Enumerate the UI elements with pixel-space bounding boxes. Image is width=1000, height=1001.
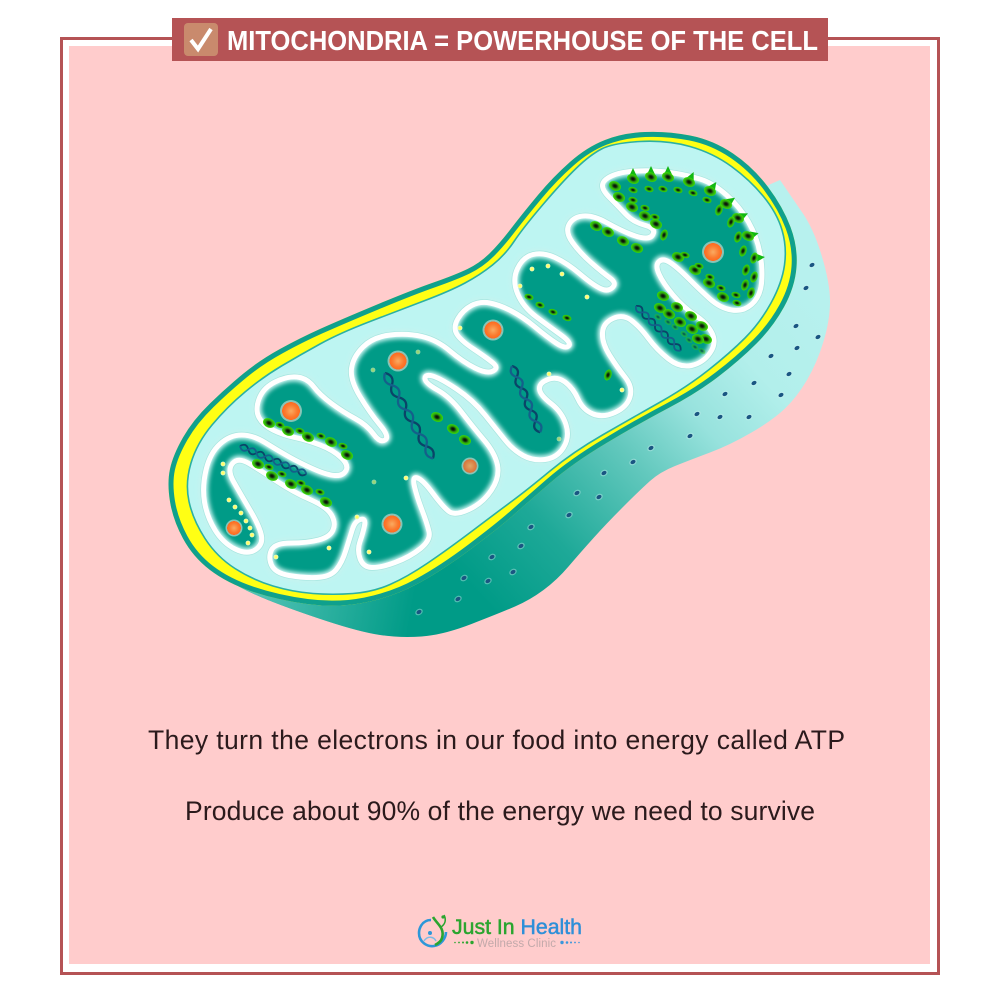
matrix and inner membrane cristae bbox=[204, 171, 762, 578]
outer membrane bbox=[168, 132, 797, 606]
logo wordmark: Just In Health bbox=[452, 916, 582, 939]
logo green dots bbox=[454, 941, 474, 944]
mitochondrion illustration bbox=[168, 132, 830, 637]
title text: MITOCHONDRIA = POWERHOUSE OF THE CELL bbox=[227, 25, 818, 56]
green organelles bbox=[250, 170, 759, 509]
icon: check box bbox=[184, 23, 218, 56]
logo tagline: Wellness Clinic bbox=[477, 938, 556, 950]
text: ATP statement: They turn the electrons in our food into energy called ATP bbox=[148, 725, 845, 755]
orange granules bbox=[226, 241, 724, 536]
3D body of the mitochondrion bbox=[200, 180, 830, 637]
logo: Just In Health Wellness Clinic bbox=[419, 915, 582, 950]
surface pores bbox=[414, 260, 823, 617]
yellow dots bbox=[221, 264, 624, 559]
green membrane cones bbox=[629, 166, 765, 262]
title banner bbox=[172, 18, 828, 61]
logo blue dots bbox=[560, 941, 580, 944]
text: 90% energy statement: Produce about 90% of the energy we need to survive bbox=[185, 796, 815, 826]
icon: logo emblem bbox=[419, 915, 446, 946]
DNA strands bbox=[239, 304, 683, 477]
